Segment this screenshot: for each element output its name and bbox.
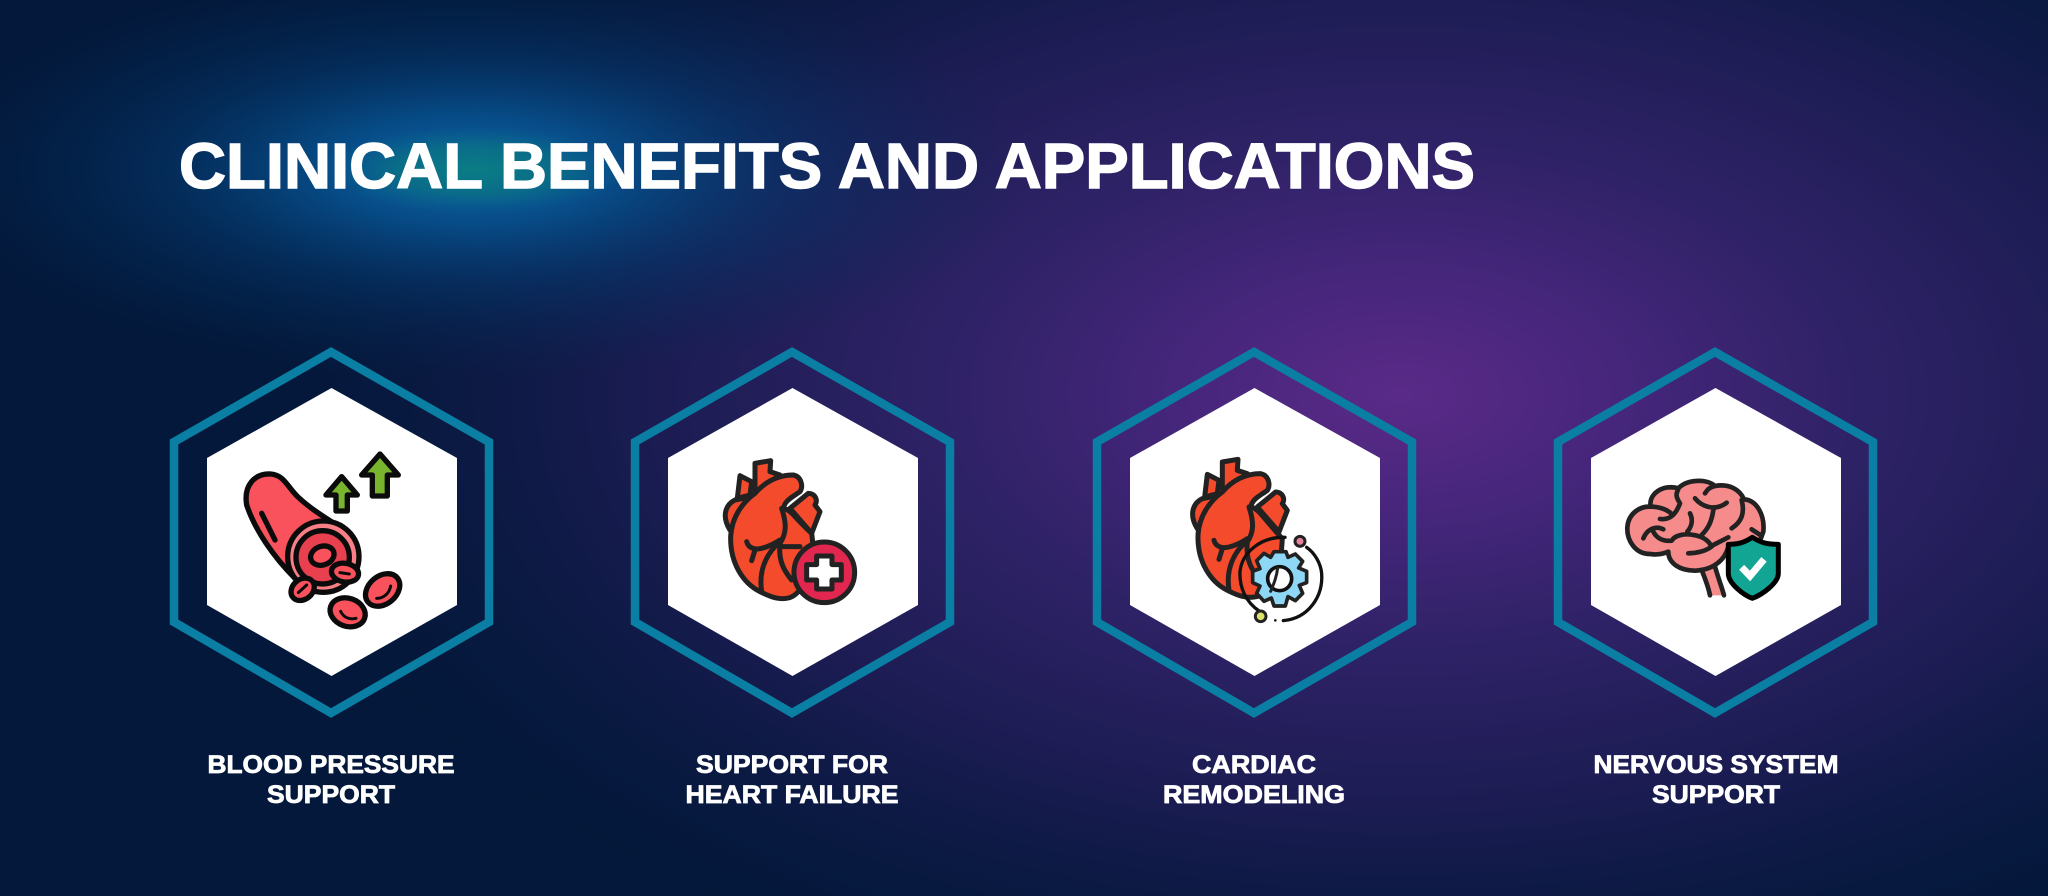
white hexagon: blood pressure [207, 388, 457, 676]
label: blood pressure support: SUPPORT [267, 781, 395, 809]
label: cardiac remodeling: REMODELING [1163, 781, 1345, 809]
label: support for heart failure: SUPPORT FOR [696, 751, 888, 779]
panel: cardiac remodeling [1097, 352, 1412, 809]
panel: blood pressure support [174, 352, 489, 809]
label: cardiac remodeling: CARDIAC [1192, 751, 1316, 779]
panel: nervous system support [1558, 352, 1873, 809]
white hexagon: heart failure [668, 388, 918, 676]
label: support for heart failure [686, 751, 898, 809]
icon: heart with gear [1193, 459, 1322, 622]
label: support for heart failure: HEART FAILURE [686, 781, 898, 809]
white hexagon: nervous system [1591, 388, 1841, 676]
label: cardiac remodeling [1163, 751, 1345, 809]
icon: brain with shield [1627, 481, 1778, 598]
title: CLINICAL BENEFITS AND APPLICATIONS [179, 130, 1475, 202]
hexagon frame: blood pressure [174, 352, 489, 713]
hexagon frame: cardiac remodeling [1097, 352, 1412, 713]
label: nervous system support: SUPPORT [1652, 781, 1780, 809]
label: blood pressure support [208, 751, 454, 809]
icon: heart with medical cross [725, 461, 855, 603]
hexagon frame: nervous system [1558, 352, 1873, 713]
label: nervous system support: NERVOUS SYSTEM [1594, 751, 1838, 779]
icon: blood vessel with rising arrows [246, 454, 406, 632]
hexagon frame: heart failure [635, 352, 950, 713]
white hexagon: cardiac remodeling [1130, 388, 1380, 676]
label: blood pressure support: BLOOD PRESSURE [208, 751, 454, 779]
panel: support for heart failure [635, 352, 950, 809]
label: nervous system support [1594, 751, 1838, 809]
